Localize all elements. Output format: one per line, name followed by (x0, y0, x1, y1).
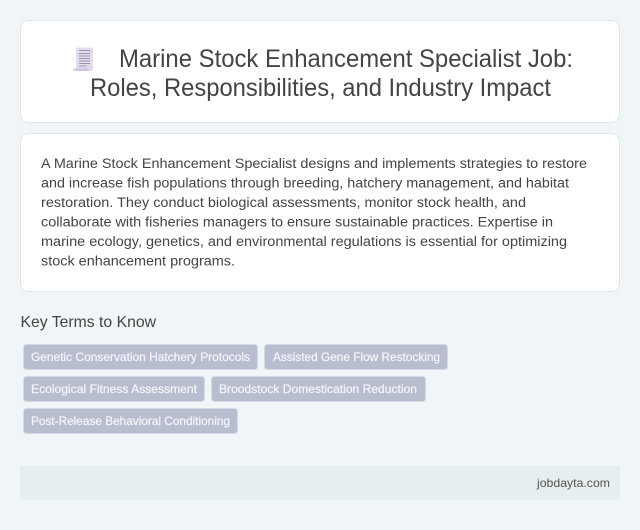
heading: key terms: Key Terms to Know (20, 314, 156, 331)
tag: broodstock (212, 376, 426, 402)
description text: and increase fish populations through breeding, hatchery management, and habitat (41, 176, 569, 192)
description text: collaborate with fisheries managers to ensure sustainable practices. Expertise in (41, 214, 553, 230)
panel: title header (20, 20, 620, 122)
tag: assisted gene flow: Assisted Gene Flow Restocking (273, 350, 440, 364)
tag: assisted gene flow (264, 344, 448, 370)
tag: broodstock: Broodstock Domestication Reduction (219, 382, 417, 396)
description text: A Marine Stock Enhancement Specialist designs and implements strategies to restore (41, 156, 587, 172)
description text: stock enhancement programs. (41, 254, 235, 270)
tag: post-release: Post-Release Behavioral Conditioning (31, 414, 230, 428)
icon: document scroll (73, 48, 93, 71)
footer bar (20, 466, 620, 500)
title text: Marine Stock Enhancement Specialist Job: (119, 45, 573, 73)
description text: marine ecology, genetics, and environmental regulations is essential for optimizing (41, 234, 567, 250)
tag: ecological fitness (24, 376, 204, 402)
description text: restoration. They conduct biological assessments, monitor stock health, and (41, 195, 526, 211)
title text: Roles, Responsibilities, and Industry Impact (90, 74, 551, 102)
tag: genetic conservation: Genetic Conservation Hatchery Protocols (31, 350, 250, 364)
title text (90, 45, 573, 102)
description text (41, 156, 587, 270)
tag: ecological fitness: Ecological Fitness Assessment (31, 382, 198, 396)
tag: genetic conservation (24, 344, 258, 370)
panel: description (20, 134, 620, 292)
footer bar: jobdayta.com (536, 476, 610, 490)
tag: post-release (24, 408, 238, 434)
